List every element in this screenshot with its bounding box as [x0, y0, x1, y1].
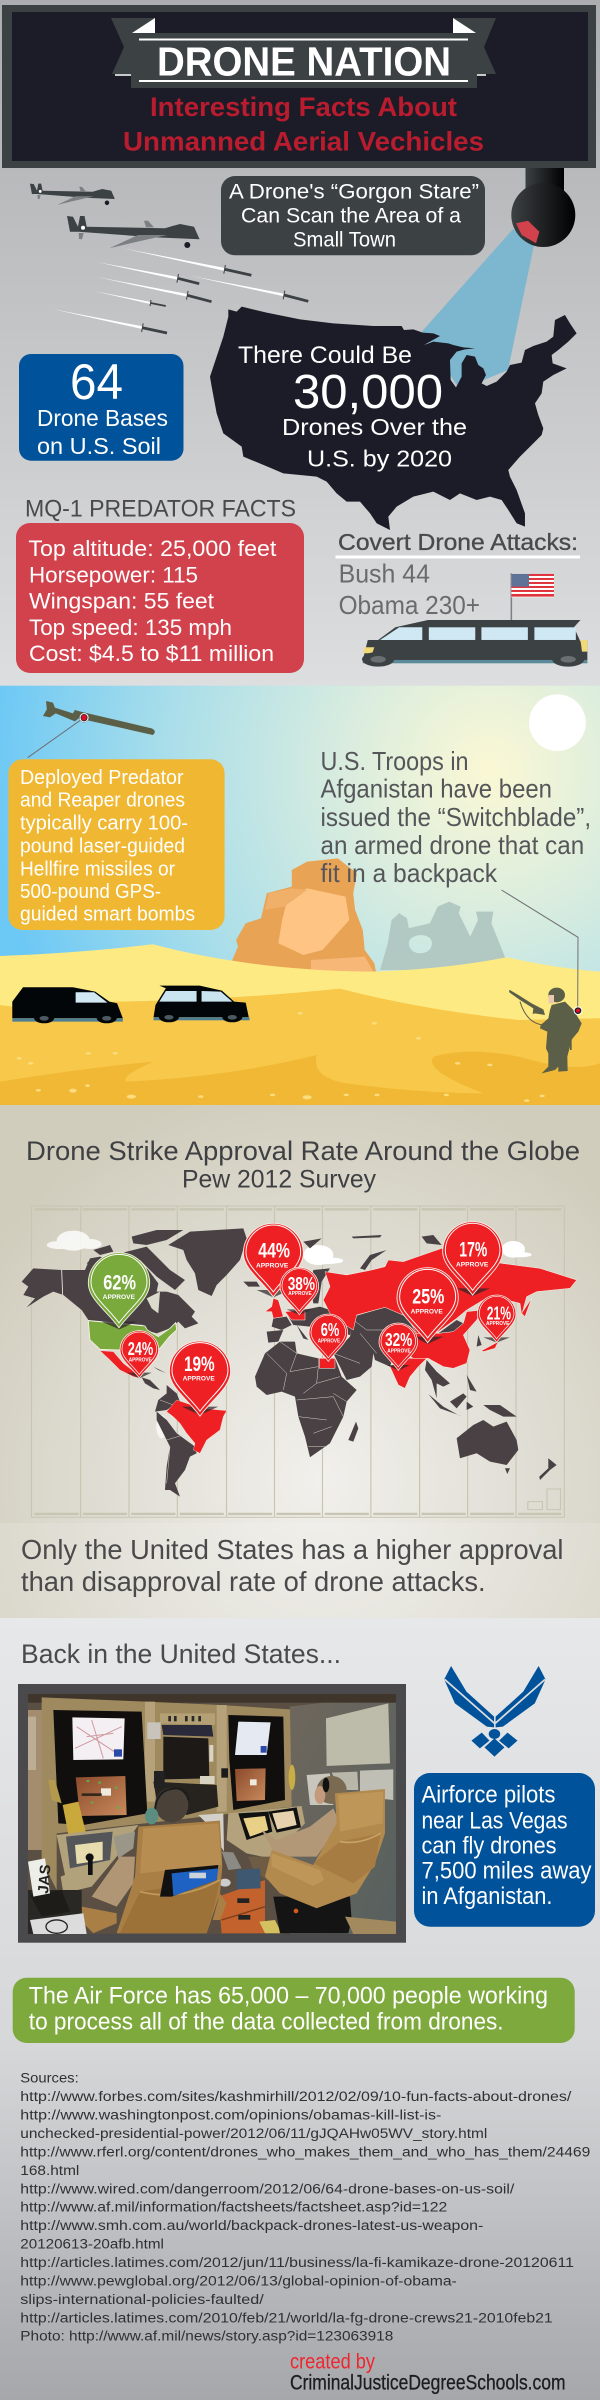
operators [92, 1776, 347, 1907]
photo sign: JAS [35, 1864, 55, 1894]
callout: airforce pilots: in Afganistan. [422, 1883, 552, 1910]
text block: sources: http://www.rferl.org/content/drones_who_makes_them_and_who_has_them/24469 [20, 2144, 590, 2159]
pin labels: 44% [258, 1240, 290, 1263]
pin: Egypt [309, 1314, 348, 1361]
icon: van two [154, 986, 250, 1022]
heading: MQ-1 predator facts: MQ-1 PREDATOR FACTS [25, 496, 296, 523]
pin labels: 32% [385, 1330, 412, 1350]
text: switchblade note [320, 746, 591, 888]
text: switchblade note: Afganistan have been [320, 774, 552, 804]
callout: data processing staff: The Air Force has 65,000 – 70,000 people working [29, 1982, 548, 2009]
text: switchblade note: an armed drone that can [320, 830, 584, 860]
icon: sun [529, 694, 586, 751]
drawers and desk items [218, 1868, 282, 1933]
icon: van one [12, 987, 123, 1023]
icon: air force logo [444, 1666, 546, 1757]
pin labels [103, 1239, 511, 1383]
left console [57, 1825, 138, 1893]
panel: covert drone attacks: Obama 230+ [339, 590, 480, 620]
panel: predator facts: Wingspan: 55 feet [29, 589, 214, 614]
pin labels: 24% [128, 1339, 153, 1359]
subtitle: Unmanned Aerial Vechicles [123, 127, 484, 157]
callout: hellfire payload: pound laser-guided [20, 836, 185, 858]
map grid frame [31, 1206, 564, 1517]
world map: europe africa asia oceania [243, 1222, 577, 1480]
pin labels: APPROVE [183, 1376, 215, 1383]
pin labels: 62% [103, 1271, 136, 1294]
callout: airforce pilots [414, 1773, 595, 1927]
photo: drone control station [18, 1684, 406, 1943]
panel: covert drone attacks: Bush 44 [339, 558, 430, 588]
text block: sources: http://articles.latimes.com/2010/feb/21/world/la-fg-drone-crews21-2010feb21 [20, 2310, 553, 2325]
center rack [147, 1713, 228, 1815]
subheading: pew survey: Pew 2012 Survey [182, 1165, 376, 1193]
panel: desert scene [0, 686, 600, 1105]
heading: approval rate: Drone Strike Approval Rate Around the Globe [26, 1136, 580, 1166]
pin labels: APPROVE [486, 1321, 510, 1327]
callout: hellfire payload [8, 759, 225, 930]
pin labels: APPROVE [318, 1339, 341, 1345]
world map: americas [22, 1228, 260, 1497]
pin: Mexico [120, 1331, 159, 1378]
text: switchblade note: U.S. Troops in [320, 746, 468, 776]
pin labels: APPROVE [288, 1291, 312, 1297]
text block: sources: http://www.af.mil/information/factsheets/factsheet.asp?id=122 [20, 2200, 447, 2215]
text block: sources: 168.html [20, 2163, 79, 2178]
callout: gorgon stare [221, 176, 485, 255]
pin: Germany [280, 1267, 319, 1315]
icon: missiles with trails [52, 248, 308, 333]
icon: drone small [30, 184, 115, 205]
pin labels: APPROVE [456, 1262, 489, 1269]
text block: sources: Sources: [20, 2071, 79, 2086]
title: DRONE NATION [157, 38, 451, 84]
lower left desk [28, 1858, 87, 1934]
callout: hellfire payload: guided smart bombs [20, 904, 195, 926]
panel: predator facts: Horsepower: 115 [29, 562, 198, 587]
pin labels: 25% [412, 1285, 445, 1308]
stat: 64 drone bases: on U.S. Soil [37, 433, 161, 459]
chairs [82, 1789, 396, 1934]
center console [198, 1806, 305, 1870]
lower background [0, 1618, 600, 2400]
text block: sources: http://www.washingtonpost.com/opinions/obamas-kill-list-is- [20, 2108, 441, 2123]
header banner [2, 5, 596, 168]
panel: world approval map [0, 1105, 600, 1618]
wall papers [48, 1703, 393, 1834]
pin: China [397, 1268, 458, 1343]
text: map conclusion: than disapproval rate of drone attacks. [21, 1566, 486, 1597]
panel: predator facts: Cost: $4.5 to $11 million [29, 641, 274, 666]
dune: foreground [0, 1052, 600, 1105]
panel: predator facts: Top speed: 135 mph [29, 615, 232, 640]
icon: hellfire missile [28, 701, 155, 758]
map text [238, 342, 467, 472]
pin labels: APPROVE [411, 1308, 443, 1315]
text: map conclusion [21, 1534, 564, 1597]
callout: hellfire payload: 500-pound GPS- [20, 881, 161, 903]
text block: sources [20, 2071, 590, 2344]
callout: hellfire payload: and Reaper drones [20, 790, 185, 812]
pin labels: 21% [487, 1303, 511, 1323]
text block: sources: http://www.wired.com/dangerroom/2012/06/64-drone-bases-on-us-soil/ [20, 2181, 515, 2196]
panel: covert drone attacks [336, 529, 580, 620]
credit: created by [290, 2350, 375, 2373]
text block: sources: 20120613-20afb.html [20, 2237, 164, 2252]
stat: 64 drone bases [19, 354, 184, 461]
panel: predator facts: Top altitude: 25,000 feet [28, 536, 276, 561]
left monitors [53, 1710, 147, 1825]
rock formation: distant [380, 902, 507, 970]
pin labels: APPROVE [129, 1358, 152, 1364]
callout: airforce pilots: Airforce pilots [422, 1782, 556, 1809]
callout: airforce pilots: can fly drones [422, 1832, 556, 1859]
pin: Russia [443, 1222, 503, 1295]
icon: drone camera [511, 168, 575, 247]
pin labels: APPROVE [387, 1349, 411, 1355]
pin labels: APPROVE [256, 1263, 289, 1270]
text block: sources: slips-international-policies-faulted/ [20, 2292, 264, 2307]
icon: soldier [509, 988, 582, 1073]
pin: Japan [477, 1295, 516, 1342]
callout: gorgon stare: Can Scan the Area of a [241, 204, 461, 227]
credit [290, 2350, 566, 2394]
stat: 64 drone bases: 64 [70, 354, 123, 410]
heading: back in the united states: Back in the United States... [21, 1639, 341, 1669]
callout: gorgon stare: A Drone's “Gorgon Stare” [229, 180, 479, 203]
pin: Brazil [169, 1341, 231, 1416]
pin: United States [88, 1253, 150, 1328]
text block: sources: Photo: http://www.af.mil/news/story.asp?id=123063918 [20, 2329, 393, 2344]
pin labels: 38% [288, 1274, 315, 1294]
dune: light [0, 944, 600, 1105]
map text: Drones Over the [282, 414, 467, 440]
camera beam [422, 229, 534, 390]
desert artwork [0, 701, 600, 1105]
rock formation: orange [232, 858, 376, 973]
panel: covert drone attacks: Covert Drone Attacks: [338, 529, 578, 555]
text block: sources: http://www.smh.com.au/world/backpack-drones-latest-us-weapon- [20, 2218, 483, 2233]
panel: predator facts [16, 523, 304, 673]
pin labels: 6% [321, 1320, 339, 1340]
map text: U.S. by 2020 [307, 446, 452, 472]
pin: United Kingdom [243, 1223, 303, 1297]
dune: middle [0, 989, 600, 1105]
text: switchblade note: fit in a backpack [320, 858, 498, 888]
map text: 30,000 [293, 366, 443, 419]
text block: sources: http://articles.latimes.com/2012/jun/11/business/la-fi-kamikaze-drone-20120611 [20, 2255, 574, 2270]
right monitors [228, 1715, 285, 1810]
callout: hellfire payload: typically carry 100- [20, 812, 188, 834]
pin: India [379, 1323, 418, 1370]
callout: gorgon stare: Small Town [293, 229, 396, 252]
callout: airforce pilots: near Las Vegas [422, 1807, 568, 1834]
text block: sources: http://www.forbes.com/sites/kashmirhill/2012/02/09/10-fun-facts-about-drones/ [20, 2089, 572, 2104]
callout: data processing staff: to process all of the data collected from drones. [29, 2008, 504, 2035]
pin labels: 17% [459, 1239, 488, 1262]
map: united states [210, 307, 577, 530]
text: map conclusion: Only the United States has a higher approval [21, 1534, 564, 1565]
text block: sources: http://www.pewglobal.org/2012/06/13/global-opinion-of-obama- [20, 2273, 457, 2288]
icon: drone large [67, 216, 200, 248]
icon: limousine with flag [362, 573, 587, 667]
callout: hellfire payload: Hellfire missiles or [20, 858, 175, 880]
callout: hellfire payload: Deployed Predator [20, 767, 184, 789]
callout: data processing staff [13, 1978, 575, 2043]
stat: 64 drone bases: Drone Bases [37, 405, 168, 431]
pin labels: 19% [184, 1353, 215, 1376]
antenna line to soldier [502, 890, 578, 1007]
subtitle: Interesting Facts About [150, 92, 457, 122]
subtitle [123, 92, 484, 157]
map text: There Could Be [238, 342, 412, 369]
top background [0, 0, 600, 686]
text block: sources: unchecked-presidential-power/2012/06/11/gJQAHw05WV_story.html [20, 2126, 487, 2141]
pin labels: APPROVE [103, 1294, 136, 1301]
